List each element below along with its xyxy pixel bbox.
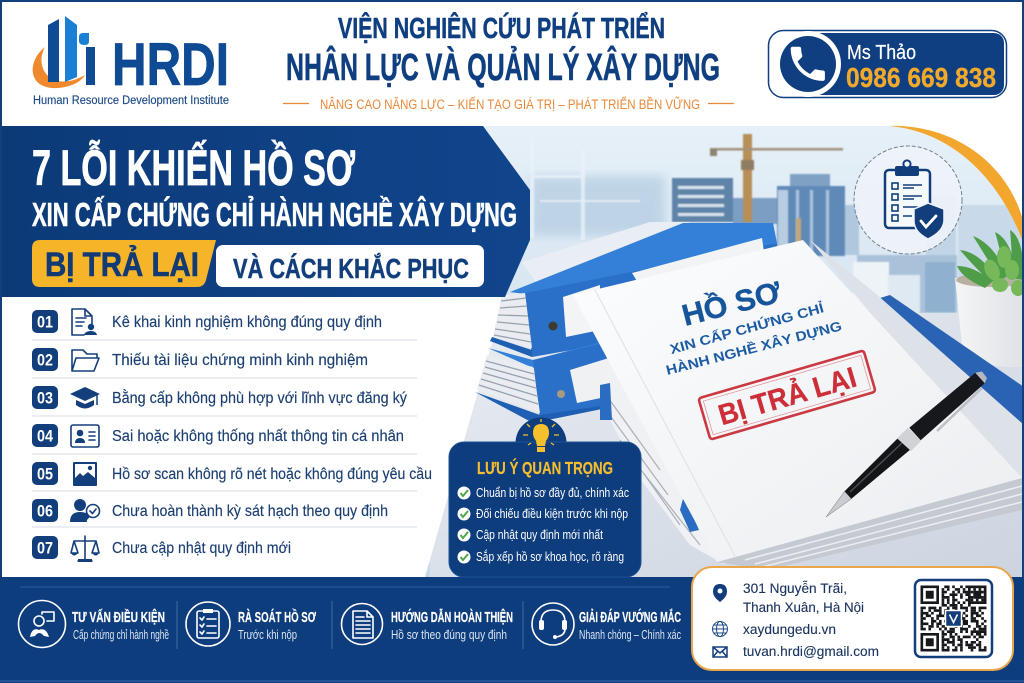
item 02: 02 xyxy=(37,350,53,370)
institute name line 1: VIỆN NGHIÊN CỨU PHÁT TRIỂN xyxy=(338,11,665,45)
footer band xyxy=(0,577,1024,683)
tip 2: Đối chiếu điều kiện trước khi nộp xyxy=(476,506,628,521)
stack edge xyxy=(717,478,1022,570)
footer services xyxy=(0,587,1024,681)
main document sheet xyxy=(573,240,1022,562)
list: 7 errors xyxy=(32,309,432,562)
icon: envelope xyxy=(713,647,727,657)
institute name line 2: NHÂN LỰC VÀ QUẢN LÝ XÂY DỰNG xyxy=(286,45,720,89)
item 04: Sai hoặc không thống nhất thông tin cá nhân xyxy=(112,428,404,445)
potted plant xyxy=(955,230,1024,367)
website: xaydungedu.vn xyxy=(743,622,836,637)
service 2: RÀ SOÁT HỒ SƠ xyxy=(238,608,316,626)
lower binder xyxy=(475,332,640,423)
tip 3: Cập nhật quy định mới nhất xyxy=(476,527,603,542)
item 01 xyxy=(32,309,382,335)
bulb bump xyxy=(516,418,566,468)
tower crane xyxy=(710,134,843,254)
icon: phone handset xyxy=(791,47,825,81)
document heading: HỒ SƠ xyxy=(678,275,785,333)
tip 1: Chuẩn bị hồ sơ đầy đủ, chính xác xyxy=(476,485,629,500)
loose paper stack xyxy=(600,355,725,565)
item 06: 06 xyxy=(37,502,53,520)
service 4: GIẢI ĐÁP VƯỚNG MẮC xyxy=(579,608,681,626)
blurred city skyline xyxy=(527,172,1022,313)
item 06: Chưa hoàn thành kỳ sát hạch theo quy định xyxy=(112,503,388,520)
item 04: 04 xyxy=(37,426,53,446)
service 3: Hồ sơ theo đúng quy định xyxy=(391,628,507,642)
item 05 xyxy=(32,462,432,486)
icon: globe xyxy=(712,622,728,636)
logo wordmark: HRDI xyxy=(112,31,229,98)
service 2 xyxy=(186,602,316,646)
light bulb icon xyxy=(523,419,559,452)
hero photo background xyxy=(425,126,1022,577)
document subtitle line 1: XIN CẤP CHỨNG CHỈ xyxy=(668,300,826,357)
service 1: Cấp chứng chỉ hành nghề xyxy=(73,628,169,642)
item 03: 03 xyxy=(37,388,53,408)
title line 2: XIN CẤP CHỨNG CHỈ HÀNH NGHỀ XÂY DỰNG xyxy=(32,196,517,233)
tips heading: LƯU Ý QUAN TRỌNG xyxy=(477,457,613,478)
service 2: Trước khi nộp xyxy=(238,628,297,642)
contact card xyxy=(692,567,1013,670)
item 04 xyxy=(32,424,404,447)
item 07: 07 xyxy=(37,538,53,558)
stamp: bị trả lại: BỊ TRẢ LẠI xyxy=(714,360,860,432)
address xyxy=(743,581,864,615)
document subtitle line 2: HÀNH NGHỀ XÂY DỰNG xyxy=(664,318,843,378)
upper binder xyxy=(490,222,777,357)
service 1: TƯ VẤN ĐIỀU KIỆN xyxy=(72,608,165,626)
item 03 xyxy=(32,386,407,409)
white pill: VÀ CÁCH KHẮC PHỤC xyxy=(233,253,469,284)
address: Thanh Xuân, Hà Nội xyxy=(743,600,864,615)
item 01: Kê khai kinh nghiệm không đúng quy định xyxy=(112,314,382,331)
header xyxy=(33,11,1006,112)
logo xyxy=(33,16,229,107)
desk surface xyxy=(430,313,1024,577)
blue folder behind the sheet xyxy=(880,295,1024,425)
service 4 xyxy=(532,603,681,645)
item 02 xyxy=(32,348,368,371)
service 4: Nhanh chóng – Chính xác xyxy=(579,628,681,642)
phone badge: 0986 669 838 xyxy=(846,62,996,93)
service 3 xyxy=(342,604,513,644)
logo tagline: Human Resource Development Institute xyxy=(33,95,229,107)
slogan: NÂNG CAO NĂNG LỰC – KIẾN TẠO GIÁ TRỊ – PHÁT TRIỂN BỀN VỮNG xyxy=(320,97,700,112)
item 05: Hồ sơ scan không rõ nét hoặc không đúng yêu cầu xyxy=(112,466,432,483)
list panel background xyxy=(0,297,505,577)
item 01: 01 xyxy=(37,312,53,332)
icon: map pin xyxy=(713,584,727,602)
phone badge xyxy=(768,30,1006,98)
service 1 xyxy=(18,600,169,648)
back sheet xyxy=(810,240,1024,480)
phone badge: Ms Thảo xyxy=(847,42,916,64)
item 07 xyxy=(32,536,291,562)
email: tuvan.hrdi@gmail.com xyxy=(743,644,879,659)
title line 1: 7 LỖI KHIẾN HỒ SƠ xyxy=(32,140,355,196)
item 07: Chưa cập nhật quy định mới xyxy=(112,540,291,557)
tips panel xyxy=(449,418,641,577)
yellow pill: BỊ TRẢ LẠI xyxy=(45,246,199,284)
tip 4: Sắp xếp hồ sơ khoa học, rõ ràng xyxy=(476,549,624,564)
pen xyxy=(826,372,987,517)
item 05: 05 xyxy=(37,464,53,484)
orange arc xyxy=(889,126,1024,245)
item 06 xyxy=(32,499,388,522)
address: 301 Nguyễn Trãi, xyxy=(743,581,847,596)
clipboard badge xyxy=(854,146,962,254)
white pill xyxy=(216,245,484,287)
logo mark xyxy=(33,16,95,88)
item 02: Thiếu tài liệu chứng minh kinh nghiệm xyxy=(112,352,368,369)
title banner xyxy=(0,126,530,297)
binders and paper stack xyxy=(475,222,1024,570)
QR code xyxy=(915,580,992,657)
service 3: HƯỚNG DẪN HOÀN THIỆN xyxy=(391,608,513,626)
item 03: Bằng cấp không phù hợp với lĩnh vực đăng ký xyxy=(112,390,407,407)
